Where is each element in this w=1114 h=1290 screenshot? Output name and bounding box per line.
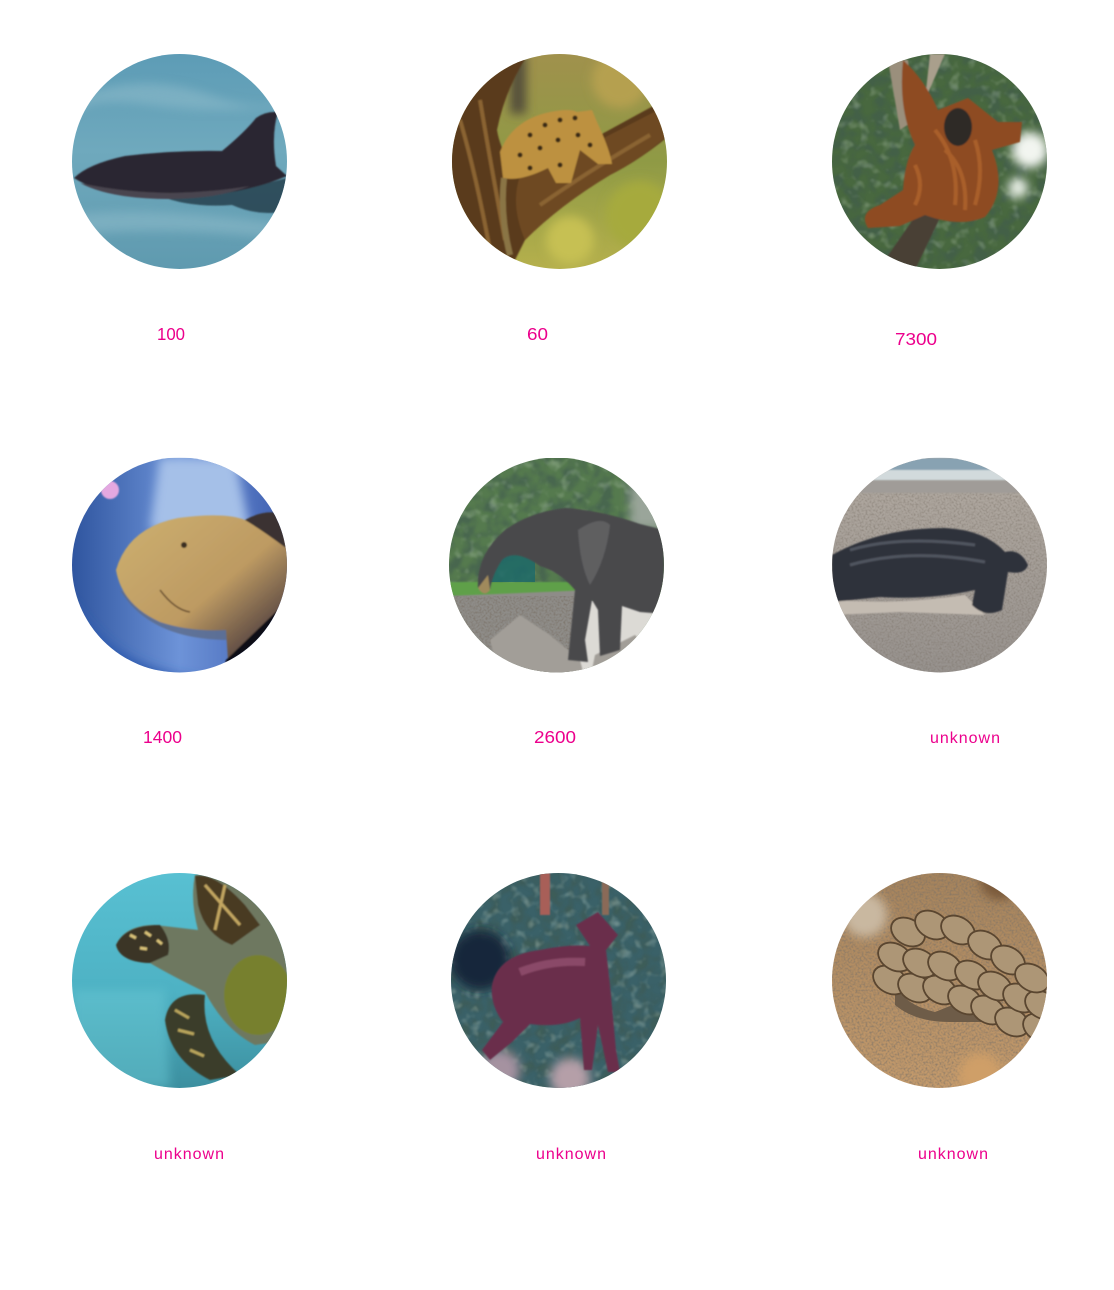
value: unknown: unknown [154, 1146, 224, 1163]
value: 7300: 7300 [895, 329, 937, 349]
panel: dolphin with population 100 [70, 54, 290, 344]
panel: orangutan with population 7300 [832, 54, 1048, 349]
value: 60: 60 [527, 324, 548, 344]
photo: sea turtle swimming in teal water [72, 873, 292, 1088]
value: 1400: 1400 [143, 727, 182, 747]
value: 100: 100 [157, 324, 185, 344]
photo: orangutan hanging in a tree [832, 54, 1048, 270]
value: unknown: unknown [918, 1146, 988, 1163]
photo: leopard resting on a tree branch [445, 52, 674, 270]
value: unknown: unknown [930, 730, 1000, 747]
panel: saola with population unknown [450, 873, 666, 1163]
photo: pangolin on dry ground [832, 873, 1047, 1088]
value: 2600: 2600 [534, 727, 576, 747]
panel: elephant with population 2600 [449, 458, 664, 747]
panel: pangolin with population unknown [832, 873, 1047, 1159]
photo: saola in dark forest undergrowth [450, 873, 666, 1098]
value: unknown: unknown [536, 1146, 606, 1163]
photo: vaquita porpoise underwater [72, 458, 288, 680]
panel: vaquita with population 1400 [72, 458, 288, 747]
photo: dolphin surfacing in blue water [70, 54, 290, 269]
panel: leopard with population 60 [445, 52, 674, 344]
photo: leatherback turtle on a sandy beach [832, 458, 1047, 675]
panel: sea turtle with population unknown [72, 873, 292, 1163]
panel: leatherback turtle with population unknown [832, 458, 1047, 747]
photo: elephant beside a stone wall [449, 458, 664, 680]
